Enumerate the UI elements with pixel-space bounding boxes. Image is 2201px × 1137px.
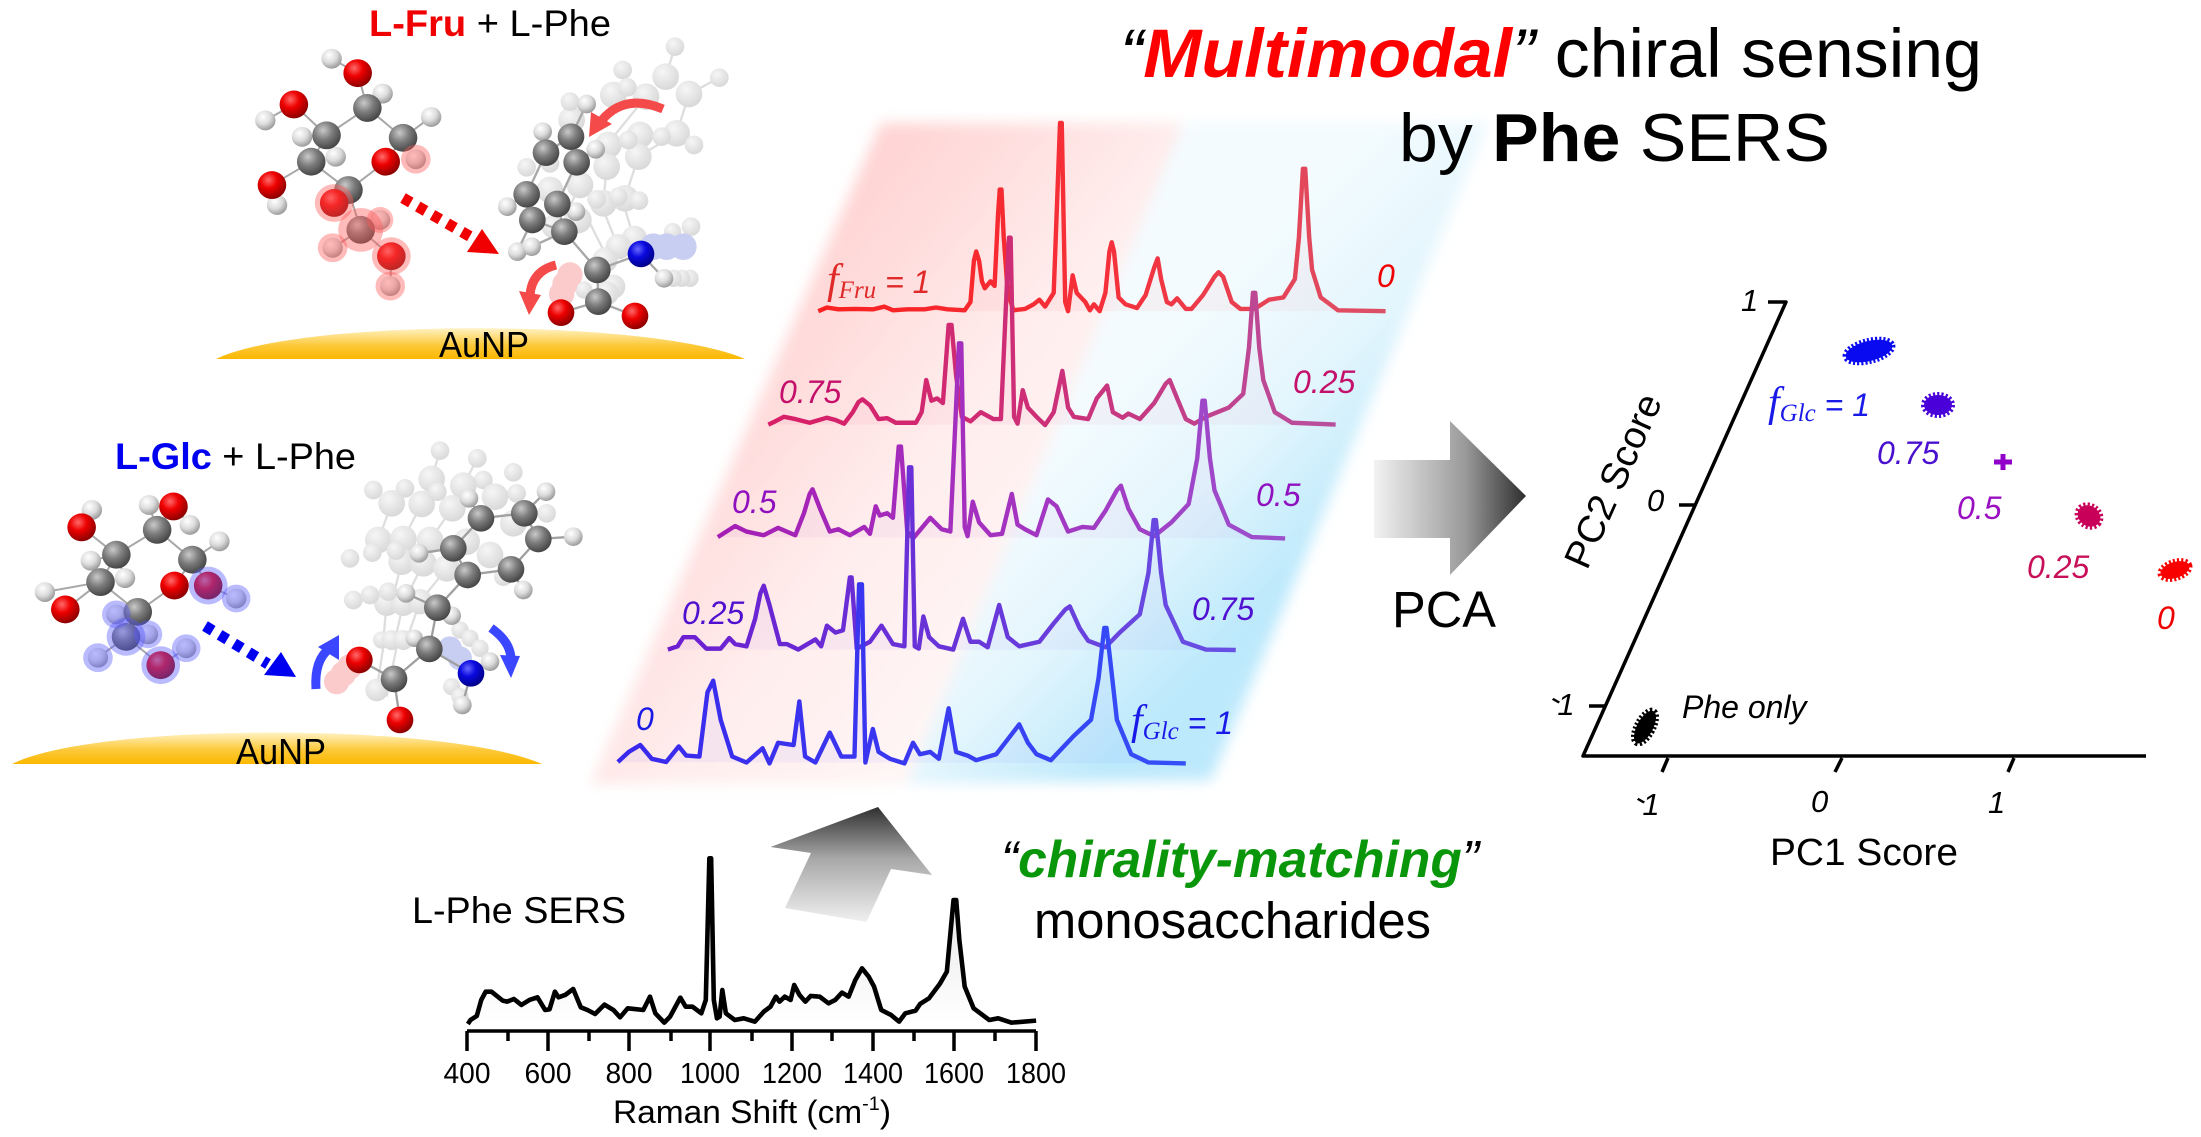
L-Phe SERS spectrum [468, 858, 1036, 1024]
molecule: L-Phe on gold, Fru [498, 37, 729, 329]
spectrum labels: f [827, 257, 844, 303]
spectrum labels: 0 [636, 701, 654, 737]
cluster: 0 [2158, 558, 2192, 582]
gold nanoparticle, top [216, 328, 745, 359]
cluster labels: 0.75 [1877, 435, 1939, 471]
cluster labels: 0.5 [1957, 490, 2002, 526]
curved arrow: red, lower [519, 265, 556, 315]
arrow: up from L-Phe spectrum [770, 807, 932, 922]
curved arrow: blue, right [491, 628, 520, 678]
cluster: fGlc 1 [1843, 335, 1895, 367]
axis tick labels: 1 [1642, 787, 1660, 822]
axis tick labels: - [1544, 681, 1570, 716]
axis title: Raman Shift (cm [613, 1094, 851, 1130]
spectrum: 0.5 [718, 343, 1285, 538]
Raman shift axis [444, 1031, 1066, 1130]
axis tick labels [1544, 283, 2005, 822]
monosaccharides label: monosaccharides [1034, 892, 1431, 949]
axis title: -1 [862, 1094, 880, 1115]
spectrum labels: Fru [838, 277, 876, 304]
axis numbers: 1200 [762, 1058, 822, 1090]
gold nanoparticle, bottom [12, 732, 542, 764]
title second line: by Phe SERS [1399, 100, 1830, 176]
L-Glc heading: L-Glc + L-Phe [115, 436, 356, 477]
spectrum labels: = 1 [1179, 705, 1233, 741]
axis title: ) [880, 1094, 891, 1130]
axis numbers: 800 [606, 1058, 652, 1090]
cluster labels: Phe only [1682, 689, 1809, 725]
spectrum labels: 0.5 [732, 484, 777, 520]
cluster labels: 0 [2157, 600, 2175, 636]
axis numbers: 1000 [680, 1058, 740, 1090]
spectrum labels: Glc [1143, 718, 1179, 745]
axis tick labels: - [1628, 781, 1655, 816]
cluster: 0.5 [1994, 454, 2012, 470]
axis numbers [444, 1058, 1066, 1090]
L-Phe SERS label: L-Phe SERS [412, 890, 626, 931]
spectrum labels: 0.75 [1192, 591, 1254, 627]
curved arrow: blue, left [316, 635, 339, 689]
AuNP label, bottom: AuNP [236, 731, 326, 772]
axis numbers: 1600 [924, 1058, 984, 1090]
PCA label: PCA [1392, 581, 1496, 638]
axis numbers: 1800 [1006, 1058, 1066, 1090]
spectrum: fFru = 1 [818, 123, 1386, 311]
chirality-matching label: “chirality-matching” [1001, 831, 1482, 889]
molecule: L-Phe on gold, Glc [324, 441, 583, 733]
axis title: PC2: PC2 Score [1557, 388, 1671, 575]
cluster: Phe only [1629, 707, 1661, 747]
spectrum labels: 0.25 [1293, 364, 1355, 400]
axis numbers: 400 [444, 1058, 490, 1090]
cluster: 0.25 [2073, 501, 2105, 531]
axis numbers: 1400 [843, 1058, 903, 1090]
arrow: PCA [1374, 421, 1526, 575]
cluster labels: Glc [1780, 400, 1816, 427]
spectrum labels: 0.5 [1256, 477, 1301, 513]
arrow: blue dotted [205, 626, 296, 677]
curved arrow: red, upper [589, 103, 663, 137]
axis title: PC1: PC1 Score [1770, 832, 1958, 874]
cluster labels [1682, 380, 2175, 725]
axis tick labels: 1 [1557, 687, 1575, 722]
axis tick labels: 1 [1741, 283, 1758, 318]
molecule: L-Fru sugar [255, 49, 441, 300]
title: “Multimodal” chiral sensing [1120, 15, 1982, 92]
axis tick labels: 1 [1988, 785, 2005, 820]
spectrum: 0.25 [668, 467, 1236, 650]
plot axes [1583, 302, 2146, 772]
cluster: 0.75 [1924, 395, 1952, 415]
spectra stack [618, 123, 1386, 763]
arrow: red dotted [403, 198, 499, 254]
PCA score plot [1544, 283, 2192, 874]
axis tick labels: 0 [1811, 784, 1828, 819]
cluster labels: 0.25 [2027, 549, 2089, 585]
molecule: L-Glc sugar [35, 493, 251, 684]
axis tick labels: 0 [1647, 483, 1664, 518]
spectrum: 0.75 [768, 238, 1336, 425]
L-Fru heading: L-Fru + L-Phe [369, 3, 611, 44]
spectrum labels: 0.75 [779, 374, 841, 410]
spectrum: 0 [618, 584, 1186, 763]
cluster labels: f [1768, 380, 1785, 426]
spectrum labels [636, 257, 1395, 745]
cluster labels: = 1 [1816, 387, 1870, 423]
spectrum labels: f [1131, 698, 1148, 744]
AuNP label, top: AuNP [439, 324, 529, 365]
spectrum labels: 0.25 [682, 595, 744, 631]
spectrum labels: 0 [1377, 258, 1395, 294]
spectra background panel [591, 123, 1488, 784]
spectrum labels: = 1 [876, 264, 930, 300]
axis numbers: 600 [524, 1058, 572, 1090]
